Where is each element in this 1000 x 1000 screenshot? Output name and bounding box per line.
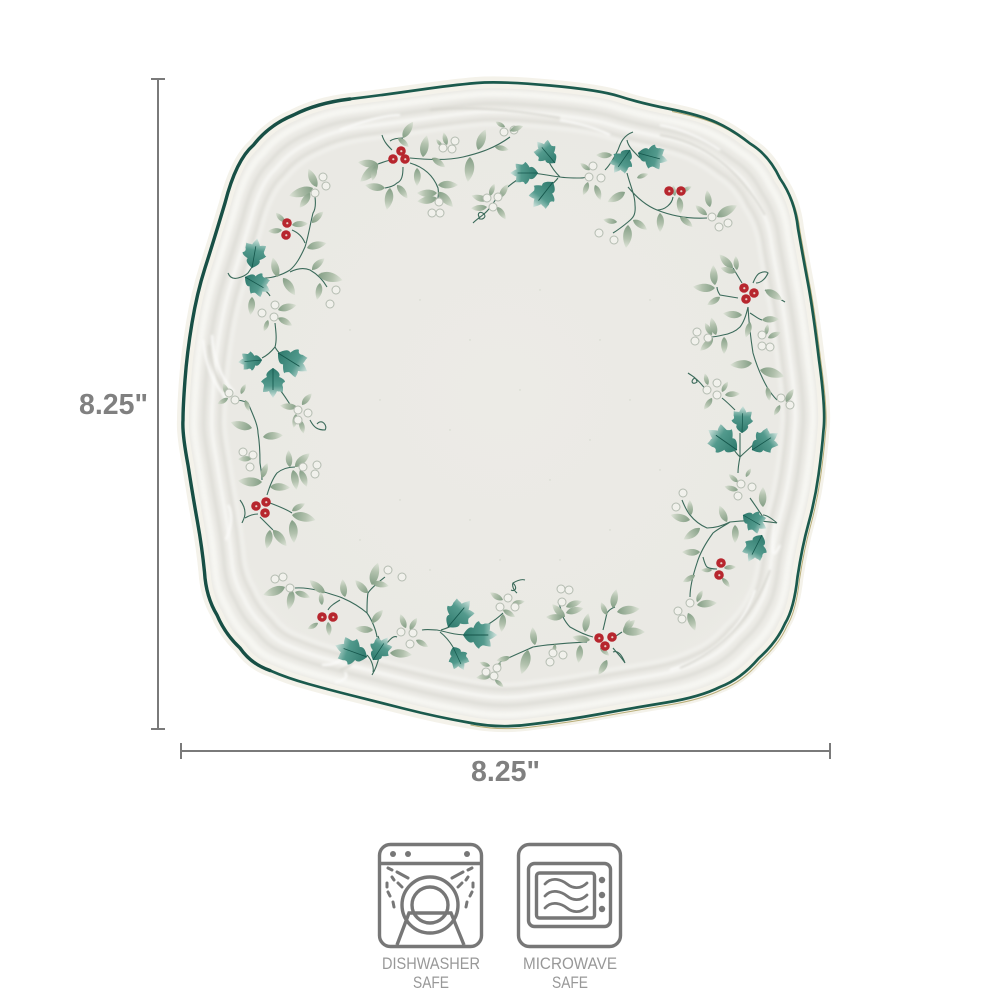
label: dishwasher safe: DISHWASHER — [382, 954, 480, 973]
vine: bottom center holly sprig — [422, 580, 525, 674]
width label: 8.25" — [471, 756, 540, 788]
plate body — [183, 82, 824, 726]
vines: all holly and berry sprigs — [217, 120, 796, 688]
vine: bottom right sprig — [476, 585, 645, 688]
glaze speckles — [349, 289, 661, 571]
vine: top left sprig — [357, 120, 510, 217]
height dimension arrow — [151, 79, 165, 729]
vine: top center holly sprig — [471, 120, 589, 223]
panel: plate — [183, 82, 826, 729]
width dimension arrow — [181, 743, 830, 759]
green rim line — [183, 82, 824, 726]
label: microwave safe: MICROWAVE — [523, 954, 617, 973]
label: microwave safe: SAFE — [552, 973, 588, 992]
icon: microwave safe — [518, 844, 620, 946]
gold rim line — [470, 112, 826, 729]
vine: right lower sprig — [670, 406, 785, 632]
green rim line: heavier left side — [183, 99, 350, 670]
icon: dishwasher safe — [380, 844, 482, 946]
vine: right upper sprig — [688, 252, 796, 417]
vine: left upper sprig — [228, 167, 344, 407]
vine: left lower sprig — [217, 382, 326, 549]
height label: 8.25" — [79, 389, 148, 421]
label: dishwasher safe: SAFE — [413, 973, 449, 992]
vine: top right sprig — [579, 132, 739, 248]
vine: bottom left sprig — [262, 562, 430, 675]
embossed rim relief — [194, 94, 813, 715]
